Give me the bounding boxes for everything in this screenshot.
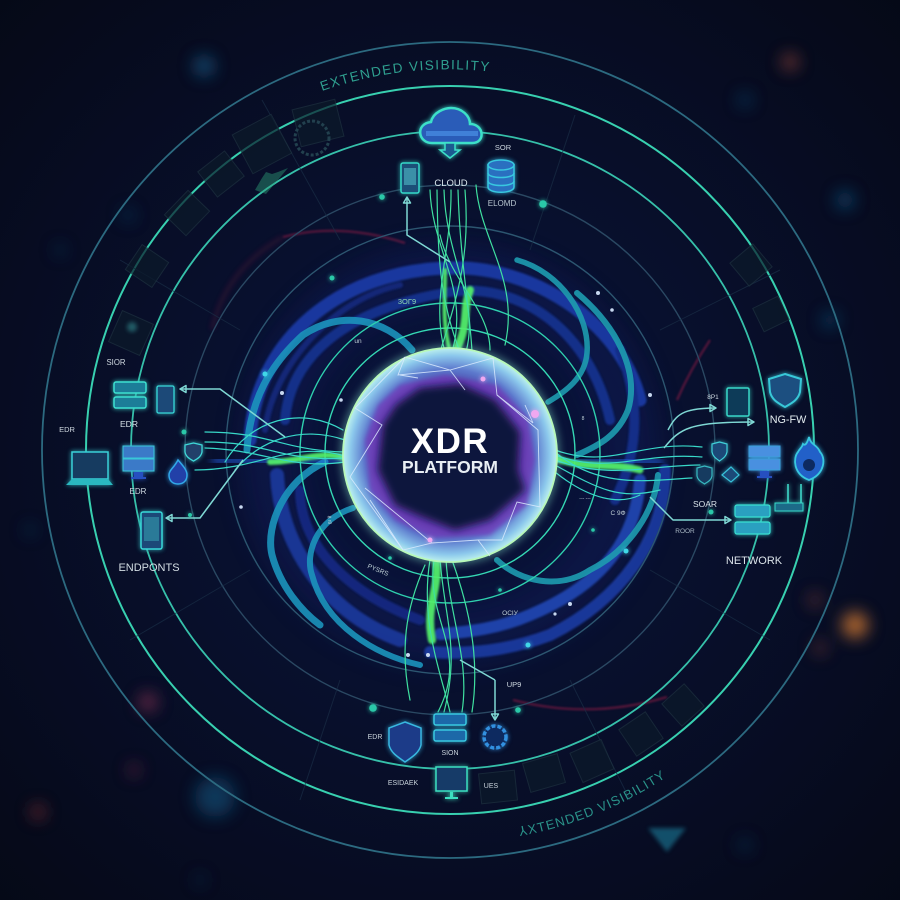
icon: monitor: [436, 767, 467, 799]
XDR title: XDR: [411, 422, 489, 461]
icon: cloud: [420, 108, 482, 158]
top cluster: cloud: [401, 108, 516, 208]
icon: phone: [141, 512, 162, 549]
label: small right: 8P1: [707, 394, 719, 401]
right lines: [555, 446, 702, 500]
bottom lines: [405, 560, 475, 712]
tiny ring labels: un: [354, 338, 362, 345]
icon: router: [775, 484, 803, 511]
label: edr upper: EDR: [120, 419, 138, 429]
label: edr lower: EDR: [130, 487, 147, 496]
icon: network servers: [735, 505, 770, 534]
connector arrows: [166, 197, 754, 720]
right cluster: network: [675, 374, 823, 567]
teal arcs: [247, 260, 658, 665]
label: sor: SOR: [495, 143, 512, 152]
icon: server bottom: [434, 714, 466, 741]
white particles: [239, 291, 652, 657]
sphere: XDR platform core: [340, 345, 560, 565]
sphere highlights: [428, 376, 539, 542]
green data streams: [195, 185, 702, 712]
label: soar right: SOAR: [693, 499, 717, 509]
icon: shield small b: [697, 466, 712, 484]
icon: tablet left: [157, 386, 174, 413]
label: network: NETWORK: [726, 555, 783, 567]
extended visibility top label: EXTENDED VISIBILITY: [320, 60, 490, 91]
red accent arcs: [212, 231, 710, 709]
label: small rdor: ROOR: [675, 528, 695, 535]
label: edr bottom: EDR: [368, 734, 382, 741]
swirl glow: [270, 275, 630, 635]
icon: flame right: [795, 437, 823, 480]
icon: database: [488, 160, 514, 192]
dashboard thumbnails on visibility band: [109, 99, 789, 804]
left cluster: endpoints: [59, 358, 202, 574]
platform subtitle: PLATFORM: [402, 457, 498, 477]
tiny ring labels: C 9Ф: [610, 510, 626, 517]
crystal mesh lines: [350, 357, 540, 556]
sphere glow: [340, 345, 560, 565]
green chart thumbnail: [255, 168, 288, 194]
ring nodes: [182, 194, 714, 713]
icon: chip panel: [727, 388, 749, 416]
tiny ring labels: 8: [582, 416, 585, 422]
tiny ring labels: 3OГ9: [398, 297, 416, 306]
horizontal blue glow: [215, 460, 660, 462]
tiny ring labels: OCIУ: [502, 610, 519, 617]
bottom cluster: security: [368, 680, 521, 799]
icon: server stack: [114, 382, 146, 408]
icon: tablet: [401, 163, 419, 193]
icon: shield large: [769, 374, 801, 407]
label: soar left: SIOR: [106, 358, 126, 367]
label: ng-fw: NG-FW: [770, 414, 807, 426]
glowing tile thumbnail: [127, 322, 137, 332]
left lines: [195, 418, 345, 470]
label: elomd: ELOMD: [488, 199, 516, 208]
purple crystal ring: [365, 375, 535, 538]
label: ues: UES: [484, 783, 499, 790]
blue swirl: [247, 260, 665, 665]
label: edr far left: EDR: [59, 425, 75, 434]
extended visibility bottom label: ⅄XTENDED VISIBILITY: [520, 770, 662, 836]
label: ups: UP9: [507, 680, 521, 689]
label: siem left: ESIDAEK: [388, 780, 418, 787]
icon: server monitor: [123, 446, 154, 479]
ring spokes: [120, 100, 780, 800]
bright green trunks: [270, 270, 640, 640]
icon: diamond: [722, 467, 739, 482]
icon: shield left: [185, 443, 202, 461]
tiny ring labels: [326, 297, 626, 617]
icon: shield small a: [712, 442, 727, 461]
bokeh triangle: [648, 828, 686, 852]
label: siem: SION: [441, 750, 459, 757]
blue bands: [250, 268, 665, 653]
icon: gear: [484, 726, 506, 748]
label: cloud: CLOUD: [434, 178, 468, 189]
circular gauge thumbnail: [295, 121, 329, 155]
icon: flame left: [169, 460, 187, 484]
icon: server monitor right: [749, 446, 780, 478]
icon: shield bottom: [389, 722, 421, 762]
thumbnail frames: [109, 99, 789, 804]
label: endpoints: ENDPONTS: [118, 562, 180, 574]
top lines: [430, 185, 508, 352]
tiny ring labels: --- ---: [579, 496, 591, 502]
sphere body: [343, 348, 557, 562]
tiny ring labels: PYSRS: [366, 563, 390, 578]
icon: laptop: [66, 452, 113, 485]
tiny ring labels: 8 r8: [326, 515, 332, 525]
dark core: [378, 384, 525, 530]
